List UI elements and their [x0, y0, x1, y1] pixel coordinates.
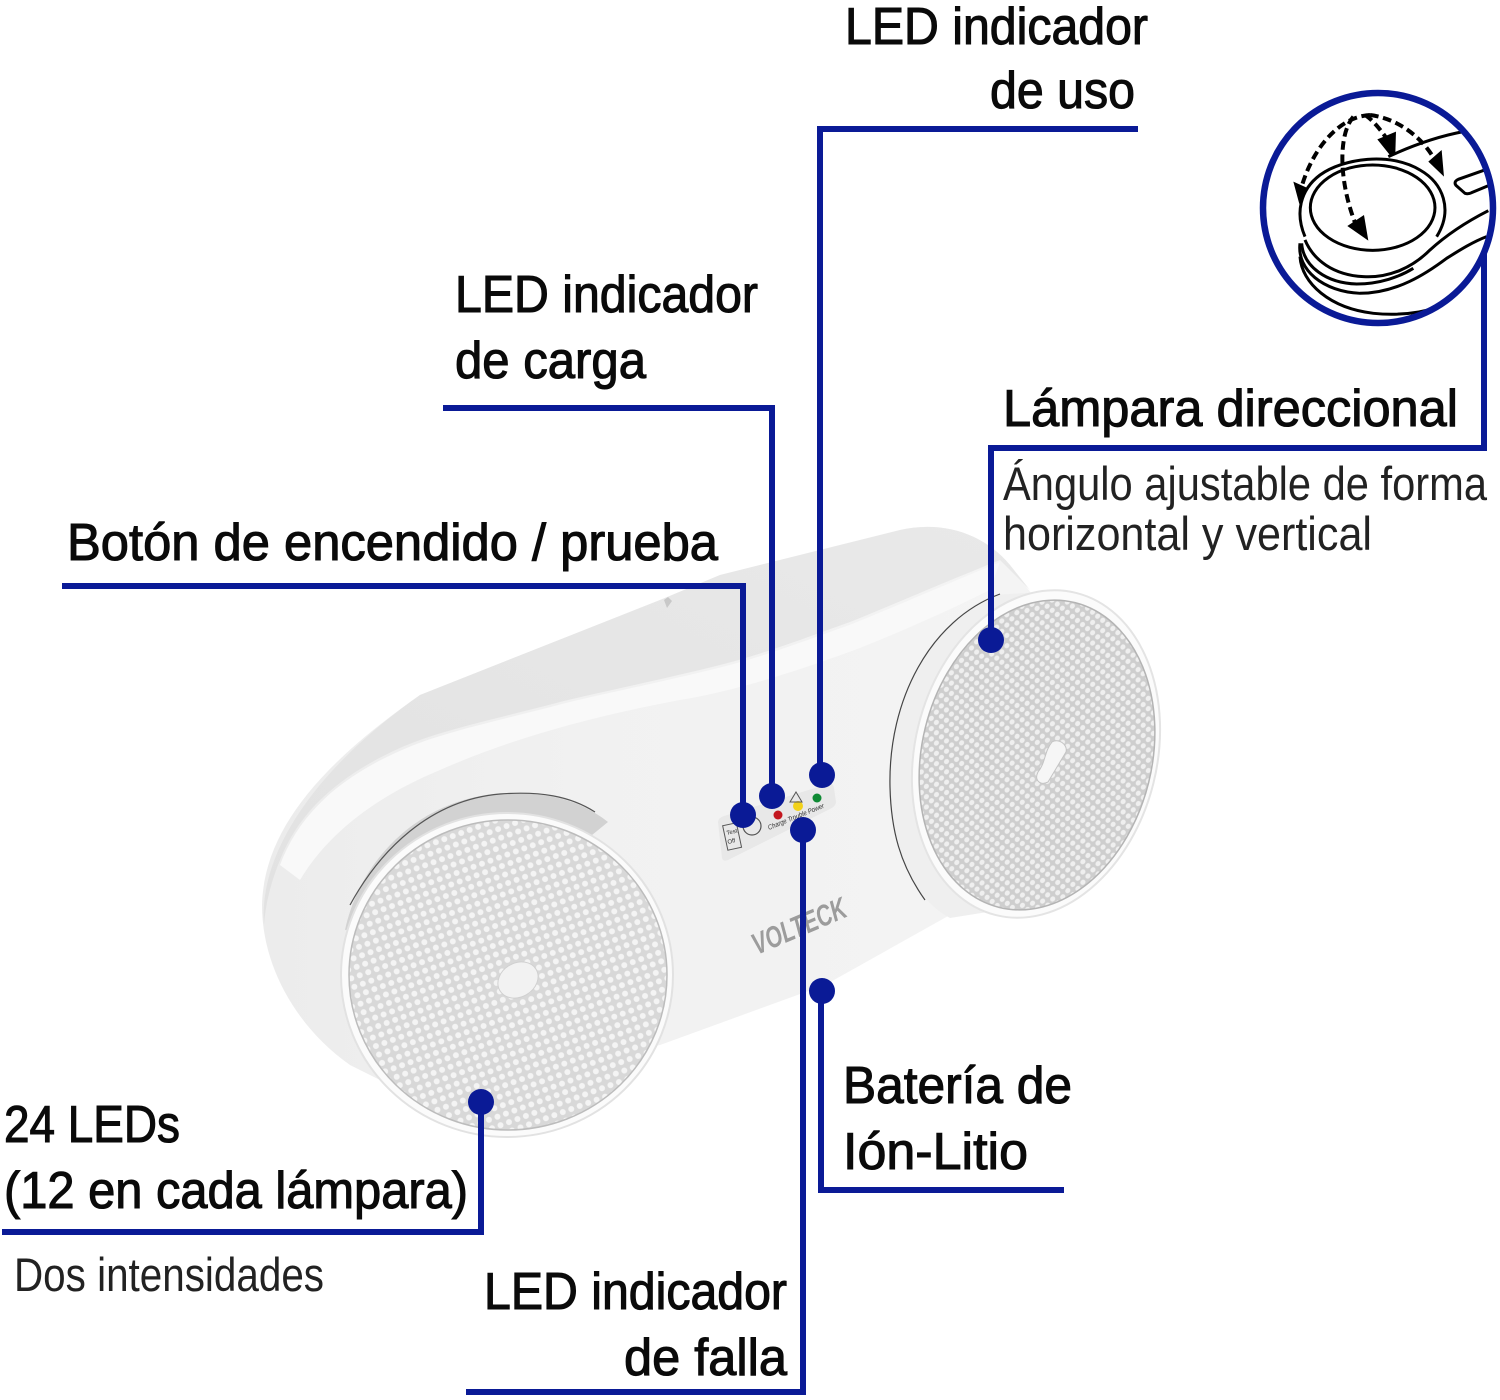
brand logo: VOLTECK	[747, 891, 853, 961]
product: emergency light	[262, 527, 1194, 1137]
dashed arc left	[1302, 115, 1370, 187]
lamp arm	[1388, 132, 1463, 157]
power button	[743, 817, 761, 835]
label: Botón de encendido / prueba	[67, 514, 718, 572]
description line two: horizontal y vertical	[1003, 507, 1372, 560]
dashed arc down	[1342, 117, 1357, 227]
callout: LED indicador de uso	[809, 0, 1148, 788]
control panel	[718, 784, 836, 861]
marker	[759, 783, 785, 809]
left lamp lens	[349, 820, 667, 1130]
inset: directional lamp illustration	[1263, 93, 1493, 323]
right lamp rim	[878, 564, 1194, 944]
leader	[821, 991, 1064, 1190]
housing top shade	[264, 527, 1030, 925]
inner ring	[1310, 165, 1435, 250]
label: Batería de	[843, 1057, 1072, 1115]
leader	[62, 586, 743, 815]
off label: Off	[727, 838, 736, 846]
heading: Lámpara direccional	[1003, 380, 1458, 438]
middle stacked ring	[1302, 243, 1413, 284]
left lamp collar edge	[350, 793, 595, 905]
inset disc	[1263, 93, 1493, 323]
left lamp	[341, 793, 673, 1137]
right lamp collar edge	[890, 594, 1000, 900]
red LED	[774, 810, 782, 820]
inset ring	[1263, 93, 1493, 323]
yellow LED	[793, 801, 803, 811]
right lamp collar	[890, 592, 1060, 918]
dashed arc right	[1370, 113, 1434, 156]
base edge	[1300, 257, 1440, 314]
housing body	[262, 527, 1060, 1090]
right lamp LED bump	[1037, 741, 1066, 783]
right lamp	[878, 564, 1194, 944]
label: LED indicador	[455, 266, 758, 324]
leader	[820, 129, 1138, 775]
label line two: de uso	[990, 62, 1135, 120]
marker	[468, 1089, 494, 1115]
callout: LED indicador de carga	[443, 266, 785, 809]
arm slot	[1455, 169, 1490, 194]
callout: Batería de Ión-Litio	[809, 978, 1072, 1190]
arrow heads	[1293, 132, 1444, 241]
leader	[466, 830, 803, 1392]
mounting notch	[664, 597, 672, 608]
housing crease highlight	[280, 562, 1000, 880]
label line two: de carga	[455, 332, 646, 390]
leader	[443, 408, 772, 796]
marker	[809, 978, 835, 1004]
leader	[2, 1102, 481, 1232]
marker	[790, 817, 816, 843]
marker	[730, 802, 756, 828]
callout: Botón de encendido / prueba	[62, 514, 756, 828]
left lamp rim	[341, 813, 673, 1137]
callout: Lámpara direccional	[978, 252, 1488, 653]
test button icon	[723, 823, 742, 850]
dashed arc middle right	[1365, 113, 1387, 137]
label: 24 LEDs	[4, 1096, 180, 1154]
callout: 24 LEDs	[2, 1089, 494, 1301]
marker	[809, 762, 835, 788]
right lamp lens	[887, 575, 1187, 935]
warning triangle	[790, 792, 802, 802]
left lamp collar	[345, 793, 608, 930]
description: Dos intensidades	[14, 1248, 324, 1301]
callout: LED indicador de falla	[466, 817, 816, 1392]
panel labels: Charge Trouble Power	[767, 803, 826, 832]
test label: Test	[726, 828, 738, 837]
label line two: (12 en cada lámpara)	[4, 1162, 468, 1220]
left lamp LED bump	[491, 955, 545, 1005]
outer ring	[1300, 159, 1445, 237]
panel plate	[718, 784, 836, 861]
label line two: de falla	[624, 1329, 787, 1387]
lower stacked ring	[1300, 237, 1487, 293]
inset line art	[1293, 115, 1490, 314]
ring bottom and arm edge	[1305, 211, 1488, 277]
marker	[978, 627, 1004, 653]
label line two: Ión-Litio	[843, 1123, 1028, 1181]
green LED	[812, 794, 822, 802]
label: LED indicador	[484, 1263, 787, 1321]
leader	[991, 252, 1484, 640]
